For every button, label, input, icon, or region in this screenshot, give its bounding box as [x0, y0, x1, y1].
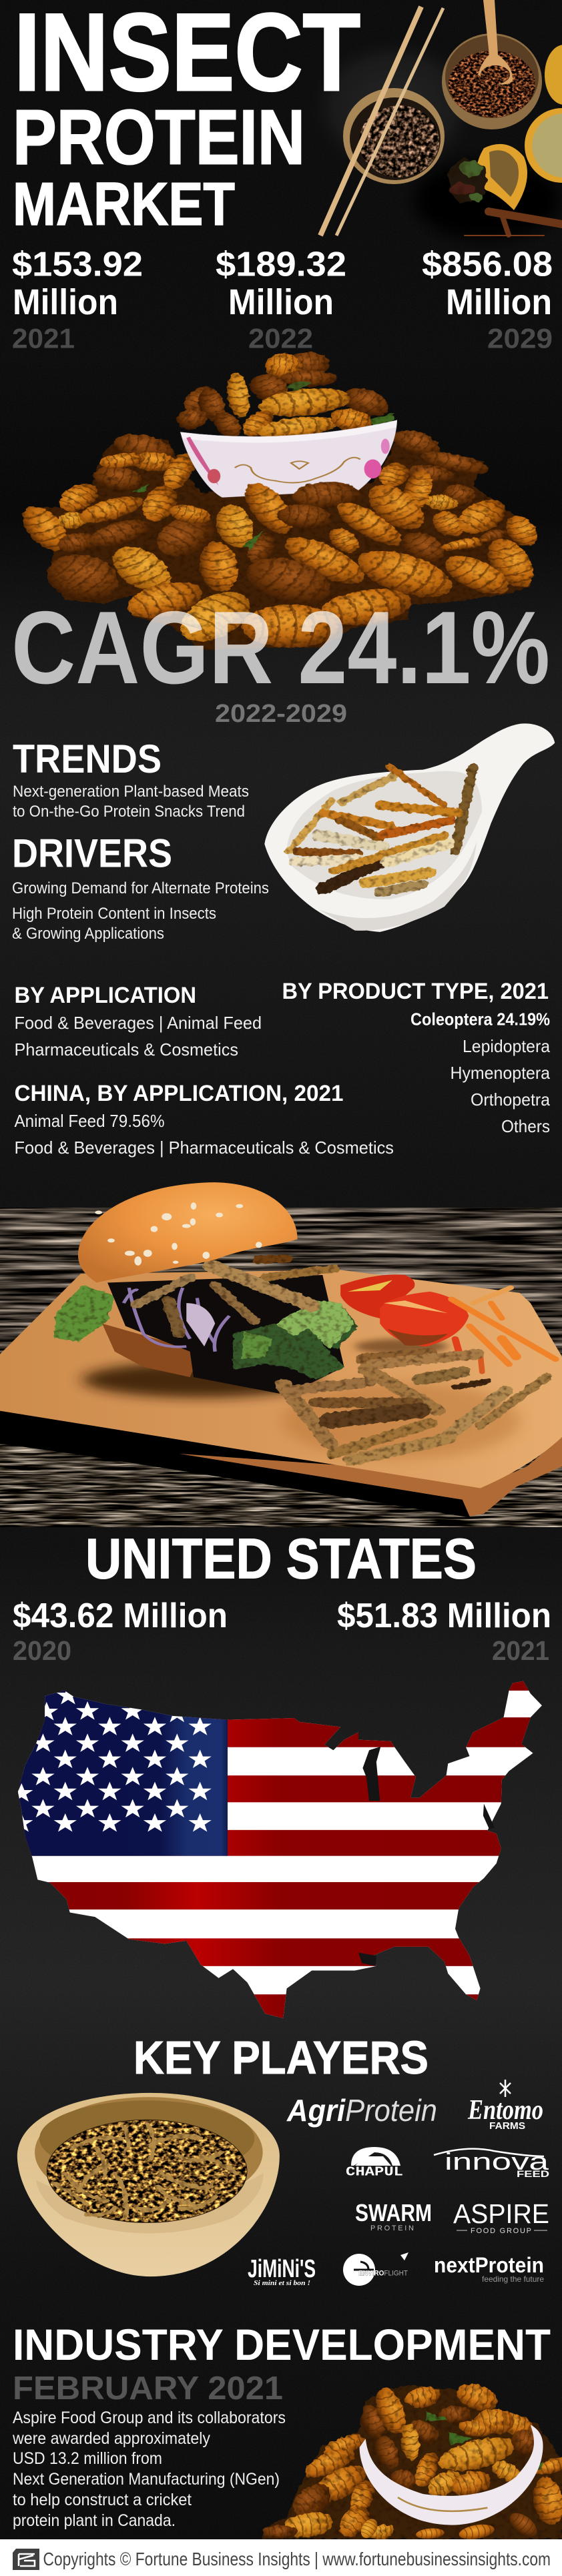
trends: to On-the-Go Protein Snacks Trend — [13, 803, 245, 821]
lemon slices — [477, 45, 562, 210]
drivers: & Growing Applications — [12, 925, 164, 943]
market value 2021: 2021 — [12, 323, 75, 354]
heading: key players: KEY PLAYERS — [133, 2032, 429, 2084]
development description — [12, 2409, 286, 2530]
logo: Swarm Protein: SWARM — [355, 2199, 432, 2226]
logo: Entomo Farms: Entomo — [467, 2095, 543, 2126]
logo: Aspire Food Group: FOOD GROUP — [471, 2227, 531, 2235]
lettuce back — [54, 1285, 115, 1341]
burger filling — [107, 1275, 358, 1395]
development description: protein plant in Canada. — [13, 2511, 176, 2530]
market value 2022: $189.32 — [216, 246, 346, 284]
market value 2022: 2022 — [248, 323, 313, 354]
title — [13, 0, 360, 238]
development description: to help construct a cricket — [13, 2491, 192, 2509]
trends: TRENDS — [13, 737, 162, 781]
market value 2021: $153.92 — [12, 246, 143, 284]
US value 2021 — [337, 1597, 551, 1666]
by application — [15, 983, 262, 1059]
market value 2022: Million — [228, 282, 334, 322]
market value 2029: Million — [446, 282, 552, 322]
china by application: CHINA, BY APPLICATION, 2021 — [15, 1081, 343, 1106]
tomatoes — [340, 1274, 469, 1346]
market value 2029: $856.08 — [422, 246, 553, 284]
photo: white spoon dish with worms — [264, 723, 555, 932]
stars — [10, 1686, 212, 1832]
chopsticks — [320, 7, 443, 236]
heading: United States: UNITED STATES — [85, 1528, 477, 1591]
date: February 2021: FEBRUARY 2021 — [13, 2371, 283, 2407]
drivers — [12, 831, 269, 943]
china by application: Food & Beverages | Pharmaceuticals & Cosmetics — [15, 1138, 394, 1158]
logo: Jimini's — [248, 2255, 316, 2287]
logo: Entomo Farms: FARMS — [489, 2120, 525, 2132]
cinnamon sticks — [465, 211, 562, 236]
by product type: Hymenoptera — [450, 1063, 551, 1083]
bowl contents — [356, 2379, 544, 2501]
carrot sticks — [452, 1288, 555, 1372]
market value 2021: Million — [13, 282, 118, 322]
logo: Jimini's: JiMiNi'S — [248, 2255, 316, 2283]
market value 2029: 2029 — [487, 323, 553, 354]
logo: Chapul — [346, 2147, 403, 2179]
footer band — [0, 2539, 562, 2576]
logo: Chapul: CHAPUL — [346, 2164, 403, 2179]
by product type: Others — [501, 1116, 550, 1136]
wooden board — [0, 1270, 562, 1517]
US value 2020: $43.62 Million — [13, 1597, 228, 1635]
logo: nextProtein: nextProtein — [434, 2253, 544, 2277]
logo: Innova Feed: FEED — [517, 2168, 549, 2179]
logo: nextProtein: feeding the future — [482, 2274, 544, 2284]
logo: Enviroflight — [343, 2252, 408, 2286]
map of the USA with flag fill — [0, 1676, 562, 2021]
china by application: Animal Feed 79.56% — [15, 1111, 164, 1131]
title: PROTEIN — [13, 93, 305, 180]
market value 2029 — [422, 246, 553, 354]
logo: Entomo Farms — [467, 2080, 543, 2132]
drivers: Growing Demand for Alternate Proteins — [12, 879, 269, 897]
footer logo — [13, 2549, 39, 2570]
mealworms — [54, 2124, 236, 2218]
hero photo: bowls, chopsticks, lemons — [300, 0, 562, 240]
logo: Enviroflight: ENVIROFLIGHT — [358, 2270, 408, 2278]
white bowl — [180, 420, 397, 498]
by product type: Orthopetra — [471, 1090, 551, 1110]
drivers: DRIVERS — [12, 831, 172, 875]
burger worms — [136, 1258, 333, 1334]
market value 2021 — [12, 246, 143, 354]
logo: AgriProtein: AgriProtein — [286, 2093, 437, 2128]
development description: were awarded approximately — [12, 2429, 210, 2448]
trends — [13, 737, 249, 821]
wood table — [0, 1208, 562, 1527]
development description: Aspire Food Group and its collaborators — [13, 2409, 286, 2427]
photo: insect burger on wooden board — [0, 1182, 562, 1527]
photo: bowl of insects, bottom — [262, 2379, 562, 2543]
by application: Food & Beverages | Animal Feed — [15, 1013, 262, 1033]
top bun — [78, 1182, 298, 1282]
photo: bowl and pile of fried silkworm pupae — [13, 352, 543, 650]
development description: USD 13.2 million from — [13, 2449, 162, 2468]
logo: Innova Feed — [434, 2148, 549, 2179]
market value 2022 — [216, 246, 346, 354]
by product type: Lepidoptera — [463, 1036, 551, 1056]
photo: wooden bowl of mealworms — [17, 2093, 280, 2276]
insects in bowl — [172, 352, 396, 442]
US value 2020 — [13, 1597, 228, 1666]
bowl of crickets — [343, 88, 445, 184]
US value 2021: 2021 — [492, 1635, 549, 1666]
by application: Pharmaceuticals & Cosmetics — [15, 1039, 238, 1059]
CAGR period: 2022-2029 — [215, 700, 347, 728]
trends: Next-generation Plant-based Meats — [13, 783, 249, 801]
by product type — [282, 979, 551, 1136]
fried worms — [283, 1353, 547, 1460]
lakes — [358, 1747, 495, 1966]
logo: Swarm Protein: PROTEIN — [370, 2224, 414, 2232]
board shadow — [0, 1408, 481, 1518]
drivers: High Protein Content in Insects — [12, 905, 216, 923]
development description: Next Generation Manufacturing (NGen) — [13, 2470, 280, 2489]
by product type: Coleoptera 24.19% — [410, 1009, 550, 1029]
logo: Aspire Food Group: ASPIRE — [453, 2198, 549, 2229]
by application: BY APPLICATION — [15, 983, 196, 1008]
bowl of mealworms with spoon — [442, 0, 542, 129]
by product type: BY PRODUCT TYPE, 2021 — [282, 979, 549, 1004]
lower bun — [102, 1324, 201, 1377]
logo: Jimini's: Si mini et si bon ! — [254, 2279, 310, 2287]
US value 2020: 2020 — [13, 1635, 71, 1666]
white bowl front — [360, 2425, 543, 2525]
worms — [288, 767, 473, 892]
US value 2021: $51.83 Million — [337, 1597, 551, 1635]
garnish — [447, 157, 487, 203]
logo: Innova Feed: innova — [445, 2148, 549, 2175]
title: MARKET — [13, 171, 235, 238]
china by application — [15, 1081, 394, 1158]
